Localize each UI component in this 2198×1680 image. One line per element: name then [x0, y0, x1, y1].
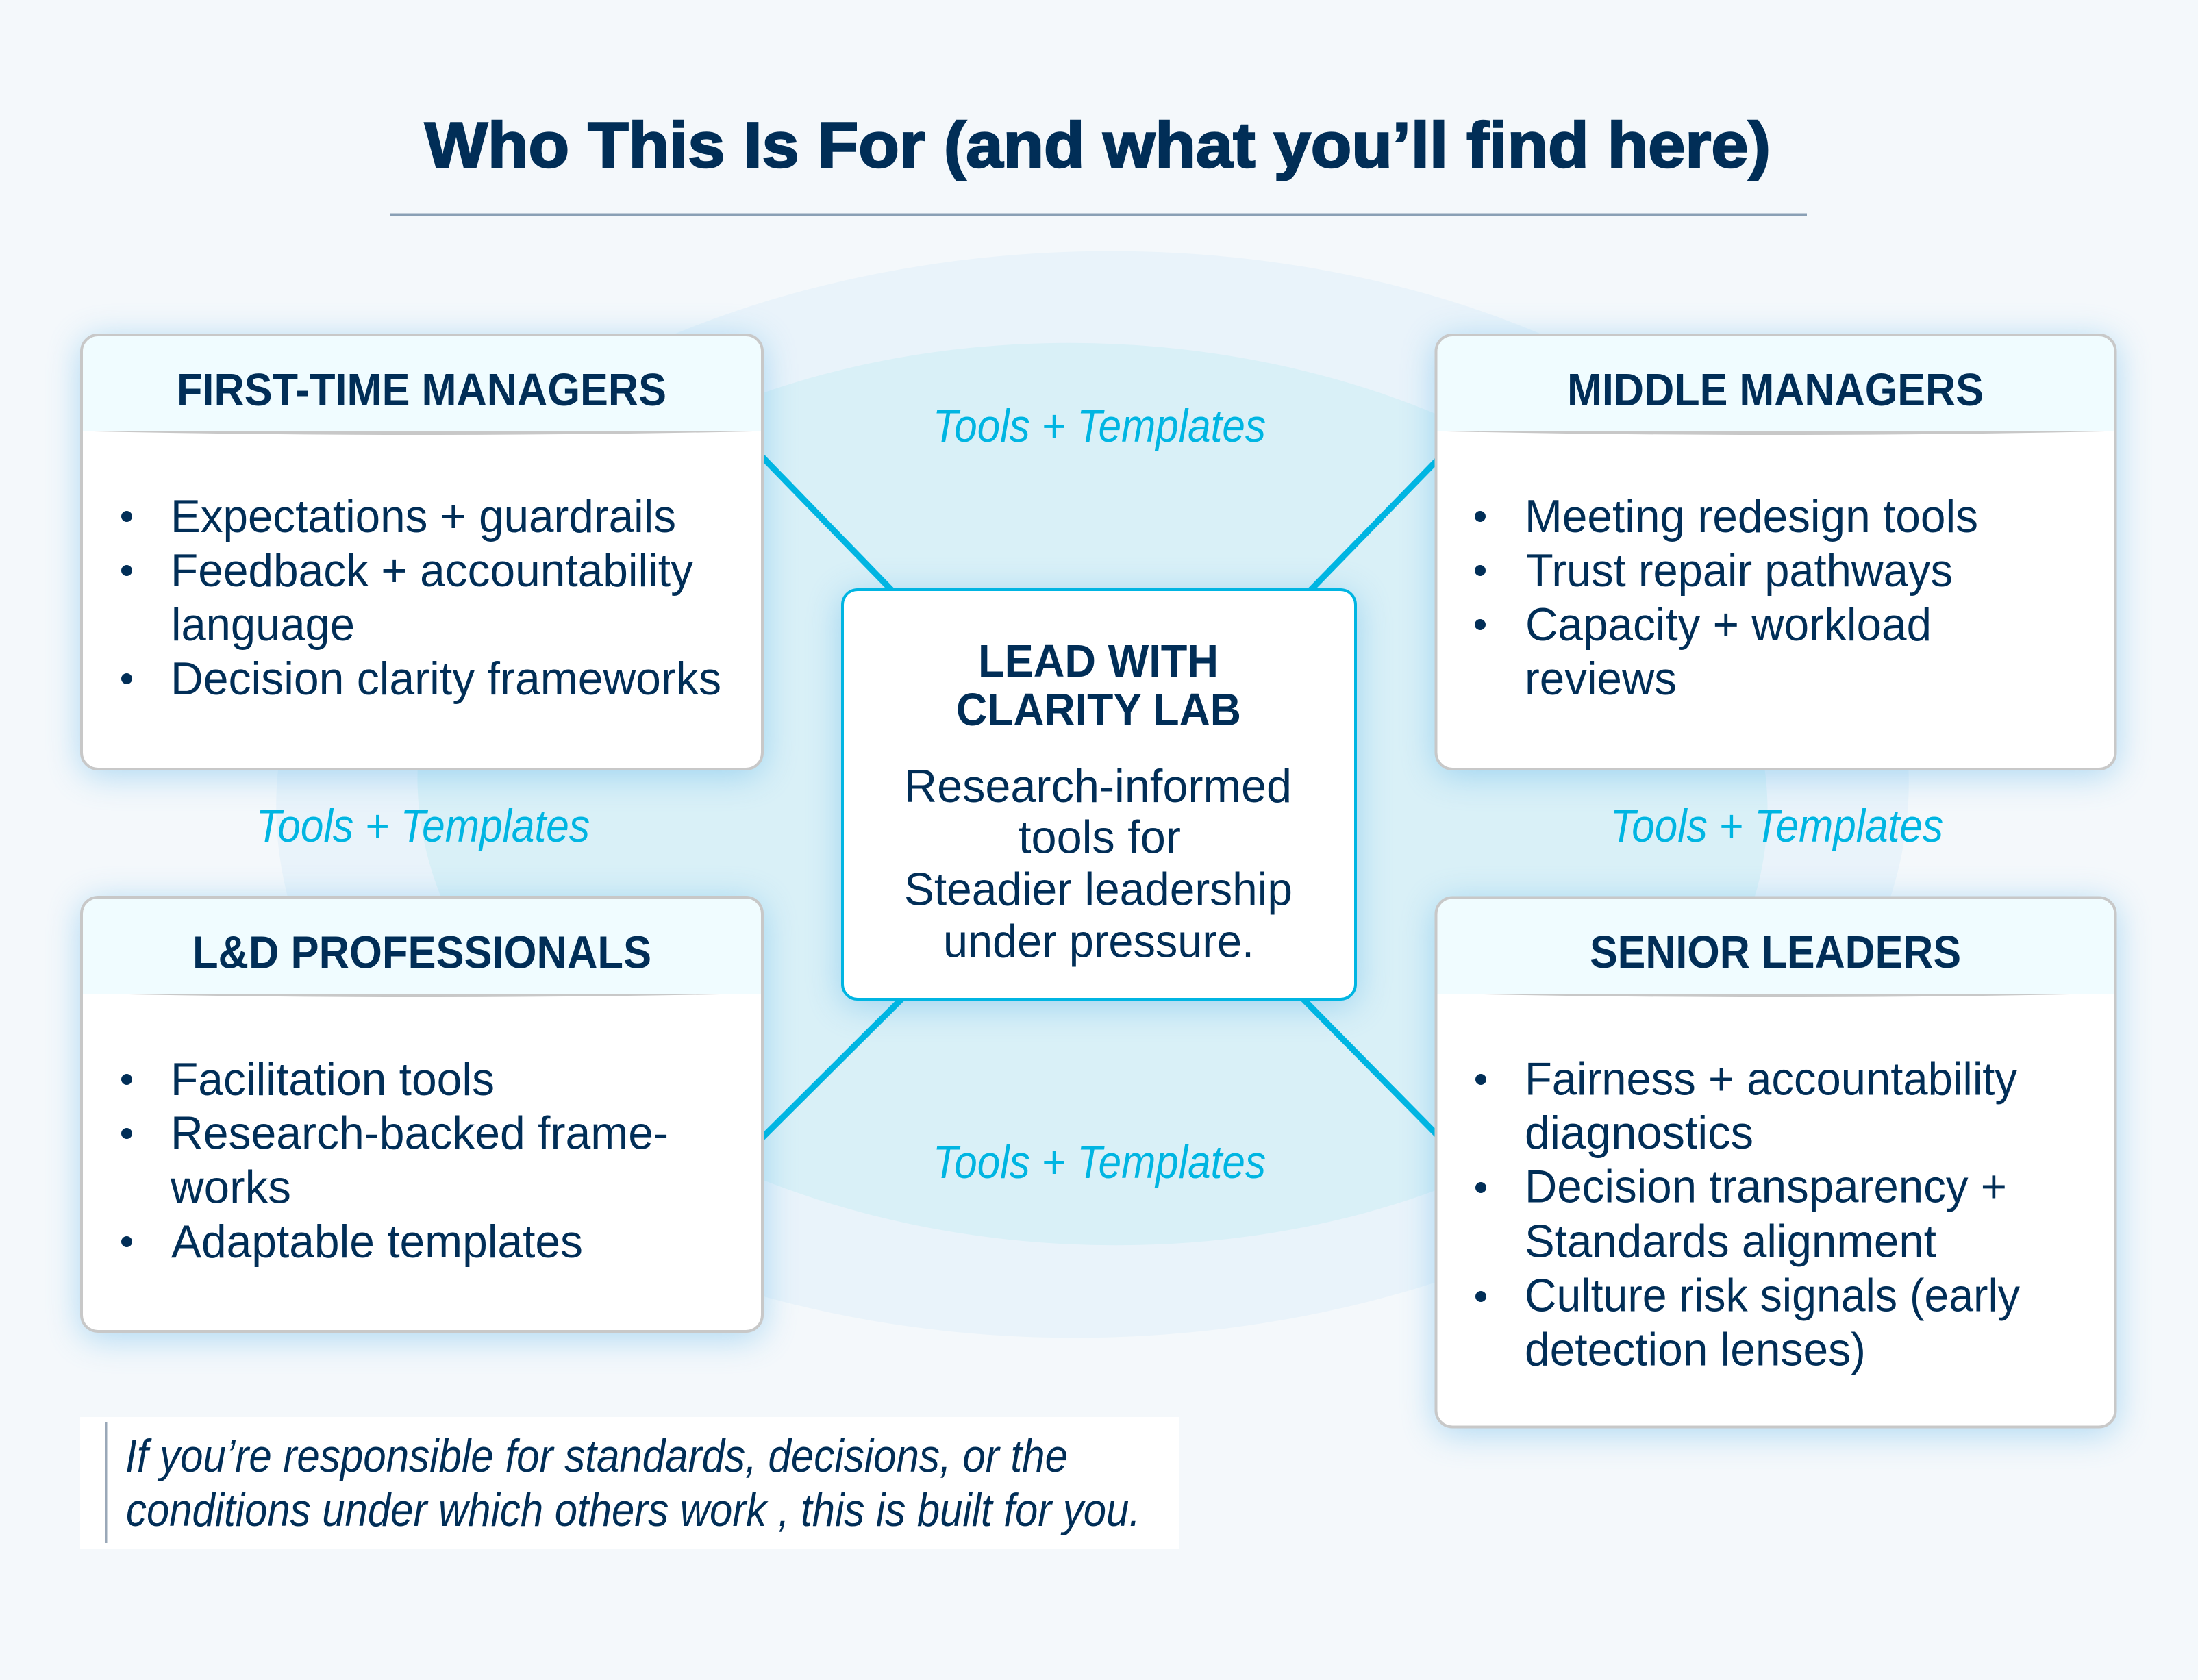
bullet list: Capacity + workload	[1525, 599, 1932, 651]
background: inner ellipse	[399, 316, 1786, 1272]
bullet list: Adaptable templates	[171, 1216, 583, 1268]
panel: center hub	[842, 590, 1356, 999]
hub description: under pressure.	[943, 915, 1254, 967]
bullet list: reviews	[1525, 653, 1677, 705]
tools label: top: Tools + Templates	[933, 400, 1266, 452]
tools label: bottom: Tools + Templates	[933, 1136, 1266, 1188]
hub heading: CLARITY LAB	[956, 684, 1241, 736]
panel: L&D professionals	[82, 897, 762, 1331]
callout note: If you’re responsible for standards, decisions, or the	[125, 1430, 1068, 1482]
connector: first-time managers	[757, 451, 893, 592]
connector lines	[757, 451, 1440, 1142]
bullet list: language	[171, 599, 355, 651]
panel: middle managers	[1436, 335, 2115, 769]
bullet list: Fairness + accountability	[1525, 1053, 2017, 1105]
bullet list	[1475, 1053, 2020, 1375]
heading: L&D PROFESSIONALS	[192, 927, 651, 978]
hub description: Steadier leadership	[904, 863, 1292, 915]
panel: first-time managers	[82, 335, 762, 769]
callout note: conditions under which others work , this is built for you.	[126, 1484, 1140, 1536]
connector: middle managers	[1309, 457, 1440, 592]
bullet list: Culture risk signals (early	[1525, 1270, 2020, 1322]
bullet list: Decision transparency +	[1525, 1160, 2007, 1212]
bullet list: Feedback + accountability	[171, 544, 693, 597]
hub heading	[956, 636, 1241, 736]
panel: senior leaders	[1436, 897, 2115, 1427]
bullet list: Standards alignment	[1525, 1215, 1936, 1267]
bullet list: Research-backed frame-	[171, 1107, 669, 1159]
bullet list	[121, 1053, 669, 1268]
tools label: right: Tools + Templates	[1610, 800, 1943, 852]
connector: L&D professionals	[758, 997, 903, 1142]
tools label: left: Tools + Templates	[256, 800, 590, 852]
hub description: Research-informed	[904, 760, 1292, 812]
heading: SENIOR LEADERS	[1590, 927, 1961, 978]
bullet list: Decision clarity frameworks	[171, 653, 721, 705]
hub description: tools for	[1019, 811, 1181, 863]
bullet list: Meeting redesign tools	[1525, 490, 1978, 542]
hub description	[904, 760, 1292, 967]
card shadows	[81, 339, 2116, 1433]
callout note	[80, 1417, 1179, 1549]
bullet list: Trust repair pathways	[1526, 544, 1953, 597]
bullet list	[1475, 490, 1978, 705]
bullet list: works	[170, 1162, 291, 1214]
heading: MIDDLE MANAGERS	[1567, 364, 1984, 416]
heading: FIRST-TIME MANAGERS	[177, 364, 666, 416]
background: outer ellipse	[262, 230, 1923, 1359]
bullet list: detection lenses)	[1525, 1323, 1866, 1375]
bullet list	[121, 490, 721, 705]
connector: senior leaders	[1301, 997, 1440, 1138]
title: Who This Is For (and what you’ll find here)	[425, 109, 1771, 181]
hub heading: LEAD WITH	[978, 636, 1219, 687]
bullet list: diagnostics	[1525, 1107, 1753, 1159]
title rule	[390, 214, 1807, 216]
bullet list: Expectations + guardrails	[171, 490, 676, 542]
bullet list: Facilitation tools	[171, 1053, 495, 1105]
